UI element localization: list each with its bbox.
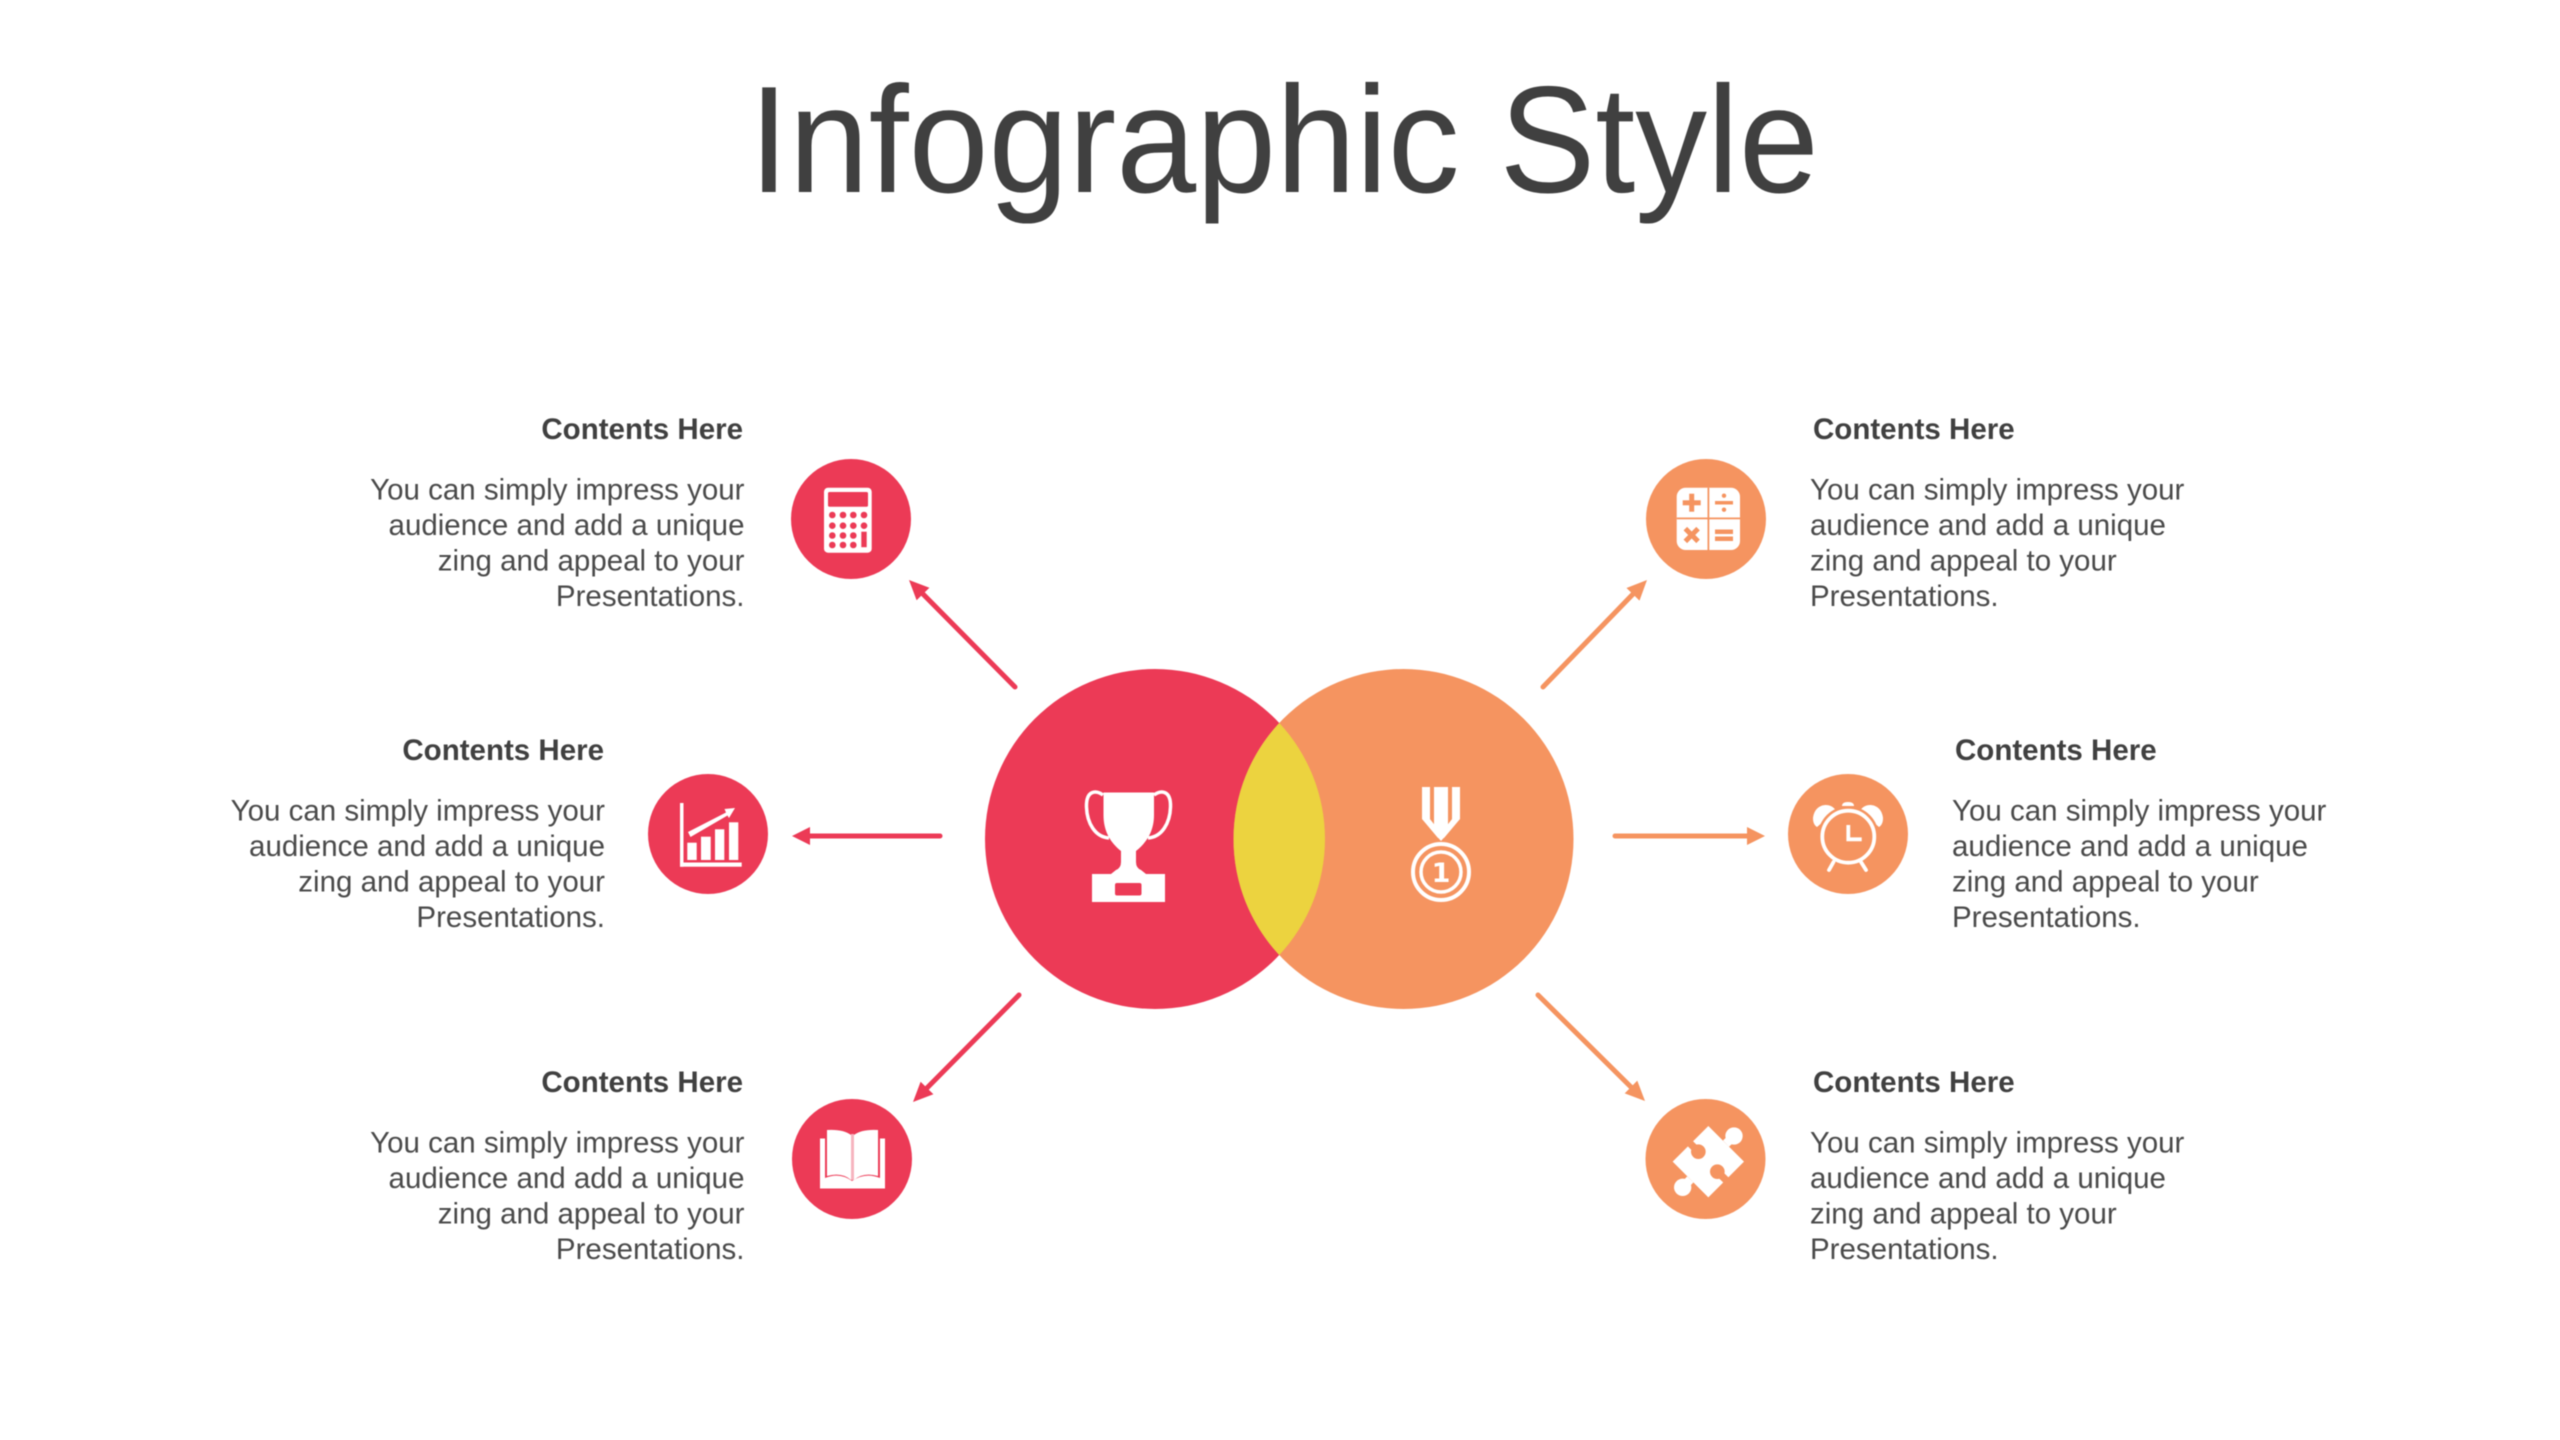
icon: alarm clock [1788,774,1908,894]
body: middle left: Presentations. [416,901,605,934]
body: top left: Presentations. [556,580,744,613]
heading: bottom right: Contents Here [1813,1066,2015,1099]
body: top left: You can simply impress your [370,474,745,506]
body: top right: audience and add a unique [1810,509,2166,542]
body: bottom left: You can simply impress your [370,1126,745,1160]
body: middle left: audience and add a unique [249,830,605,863]
body: middle left: You can simply impress your [231,794,605,828]
text block: bottom right [1810,1066,2185,1266]
icon: puzzle piece [1646,1099,1766,1219]
body: bottom left: audience and add a unique [389,1162,744,1195]
body: top right: You can simply impress your [1810,474,2185,506]
body: bottom left: Presentations. [556,1233,744,1266]
body: bottom left [370,1126,745,1266]
body: middle left: zing and appeal to your [298,866,605,898]
arrow: bottom left [913,995,1019,1102]
body: top right: zing and appeal to your [1810,544,2117,578]
heading: middle left: Contents Here [402,734,604,767]
icon: trophy [1086,792,1171,902]
icon: math operators [1646,459,1766,579]
icon: medal: 1 [1432,858,1450,889]
body: middle right: You can simply impress your [1952,794,2327,828]
circle: orange [1234,669,1574,1009]
body: middle right: audience and add a unique [1952,830,2308,863]
icon: open book [792,1099,912,1219]
overlap: yellow [1234,723,1325,955]
icon: medal [1413,787,1469,900]
body: bottom right: Presentations. [1810,1233,1999,1266]
text block: bottom left [370,1066,745,1266]
body: middle right: Presentations. [1952,901,2141,934]
body: bottom right [1810,1126,2185,1266]
text block: top right [1810,413,2185,613]
title: Infographic Style [749,55,1819,225]
venn diagram [985,669,1574,1009]
body: top left: zing and appeal to your [438,544,745,578]
body: middle right: zing and appeal to your [1952,866,2259,898]
circle: red [985,669,1325,1009]
arrow: top right [1543,580,1647,687]
icon: bar chart [648,774,768,894]
body: top left: audience and add a unique [389,509,744,542]
body: top right [1810,474,2185,613]
body: bottom right: audience and add a unique [1810,1162,2166,1195]
body: top right: Presentations. [1810,580,1999,613]
arrow: bottom right [1538,995,1645,1101]
text block: middle left [231,734,605,934]
heading: bottom left: Contents Here [541,1066,743,1099]
arrow: middle left [792,827,940,845]
body: bottom right: You can simply impress your [1810,1126,2185,1160]
body: bottom right: zing and appeal to your [1810,1198,2117,1230]
body: bottom left: zing and appeal to your [438,1198,745,1230]
body: middle left [231,794,605,934]
heading: top left: Contents Here [541,413,743,446]
text block: middle right [1952,734,2327,934]
arrow: top left [909,580,1015,687]
arrow: middle right [1615,827,1765,845]
icon: calculator [791,459,911,579]
heading: middle right: Contents Here [1955,734,2157,767]
body: top left [370,474,745,613]
body: middle right [1952,794,2327,934]
heading: top right: Contents Here [1813,413,2015,446]
text block: top left [370,413,745,613]
